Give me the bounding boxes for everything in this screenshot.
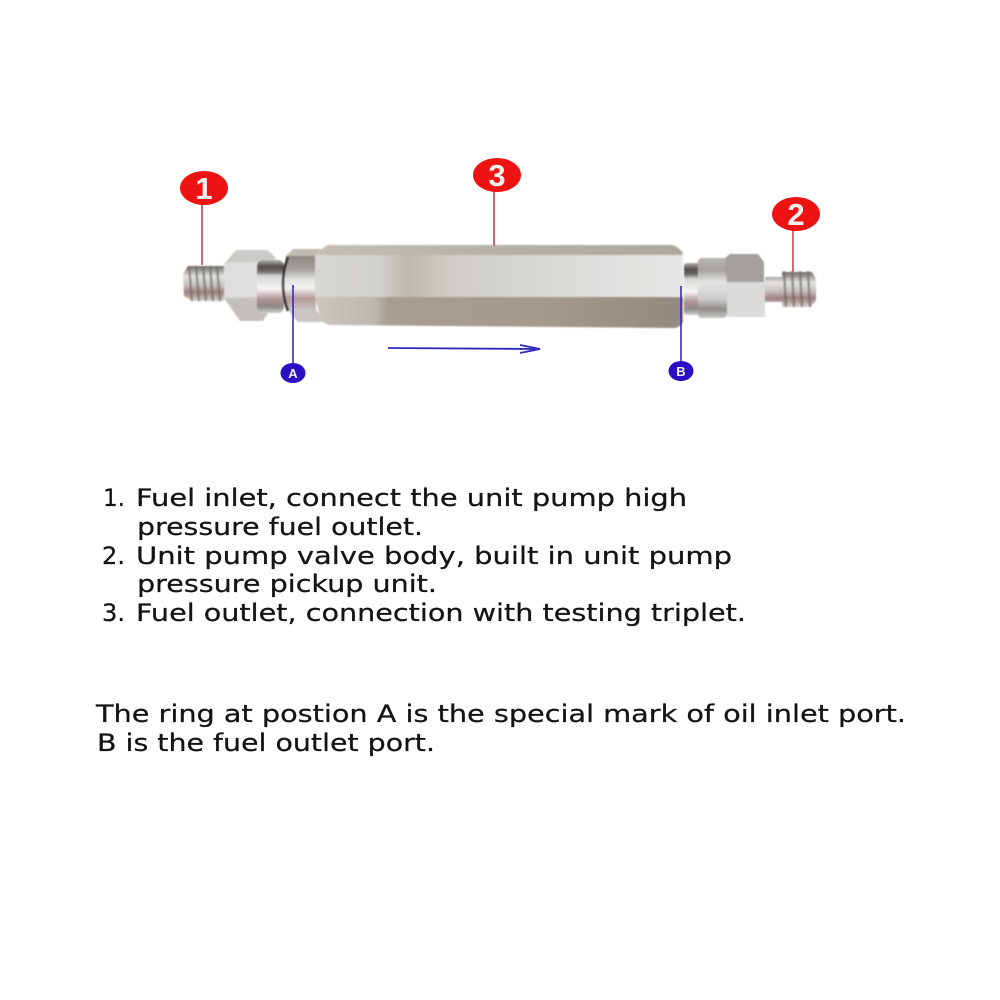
numbered parts list: 2. xyxy=(102,542,125,570)
badge 2: 2 xyxy=(787,197,805,232)
leader lines xyxy=(202,190,793,366)
note on ports A and B: B is the fuel outlet port. xyxy=(97,729,435,757)
numbered parts list: Unit pump valve body, built in unit pump xyxy=(136,542,732,570)
ring at position A xyxy=(283,257,288,311)
right threaded end xyxy=(765,271,816,307)
numbered parts list xyxy=(102,484,746,627)
left hex nut xyxy=(224,250,276,321)
badge 2 xyxy=(772,197,820,232)
badge 3 xyxy=(473,158,521,193)
flow direction arrow xyxy=(388,345,540,353)
numbered parts list: 3. xyxy=(102,599,125,627)
badge 1: 1 xyxy=(195,171,213,206)
left shoulder xyxy=(284,256,316,310)
numbered parts list: 1. xyxy=(103,484,125,512)
note on ports A and B: The ring at postion A is the special mark of oil inlet port. xyxy=(95,700,906,728)
left threaded end xyxy=(183,266,224,301)
main hexagonal body xyxy=(315,245,683,328)
badge 3: 3 xyxy=(488,158,506,193)
numbered parts list: Fuel outlet, connection with testing triplet. xyxy=(136,599,746,627)
badge A: A xyxy=(288,366,298,381)
note on ports A and B xyxy=(95,700,906,757)
badge 1 xyxy=(180,171,228,206)
product photo: fuel test fitting xyxy=(183,245,816,328)
right hex nut xyxy=(725,254,765,317)
numbered parts list: Fuel inlet, connect the unit pump high xyxy=(136,484,687,512)
right collar xyxy=(684,258,727,318)
numbered parts list: pressure fuel outlet. xyxy=(137,513,423,541)
badge B xyxy=(668,361,694,381)
numbered parts list: pressure pickup unit. xyxy=(137,570,437,598)
badge B: B xyxy=(676,364,686,379)
badge A xyxy=(280,363,306,383)
left collar xyxy=(257,260,284,313)
